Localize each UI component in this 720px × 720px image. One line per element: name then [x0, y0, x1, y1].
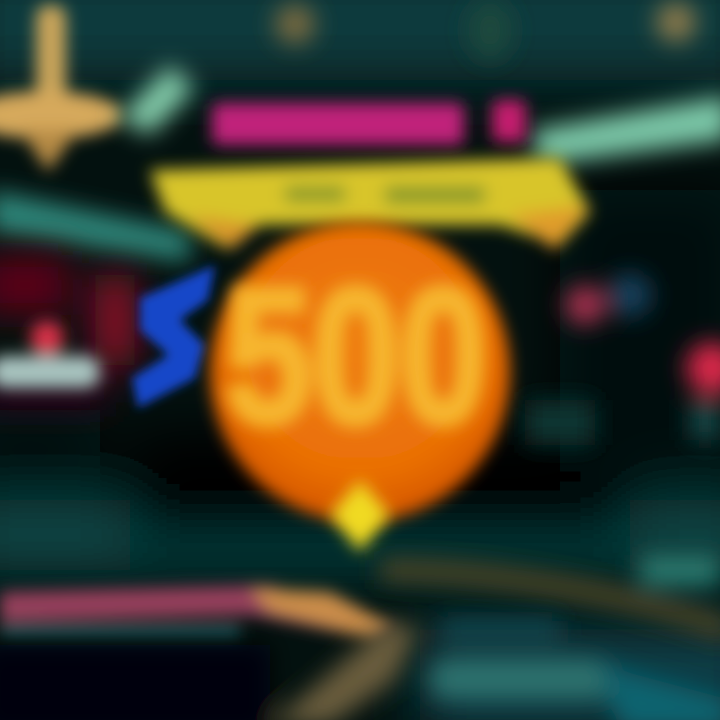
lower panel: teal curve [0, 620, 720, 720]
light beam: upper right [530, 95, 720, 165]
lower banner: left [0, 585, 395, 640]
number: 500: 500 [225, 248, 487, 463]
callout: orange disc with 500 [210, 222, 510, 522]
lower curved stripe: right [380, 555, 720, 630]
icon: yellow pointer [330, 480, 390, 552]
panel: red left shape [0, 255, 135, 405]
top ornaments [275, 0, 696, 60]
icon: golden star ornament [0, 5, 123, 172]
blue symbol [132, 265, 215, 408]
light beam: upper left [118, 65, 195, 135]
right side accents [525, 273, 720, 445]
heading: yellow ribbon [150, 158, 590, 250]
icon: red dot and white bar [0, 321, 100, 388]
light beam: left [0, 190, 190, 262]
heading: magenta banner [212, 100, 526, 145]
